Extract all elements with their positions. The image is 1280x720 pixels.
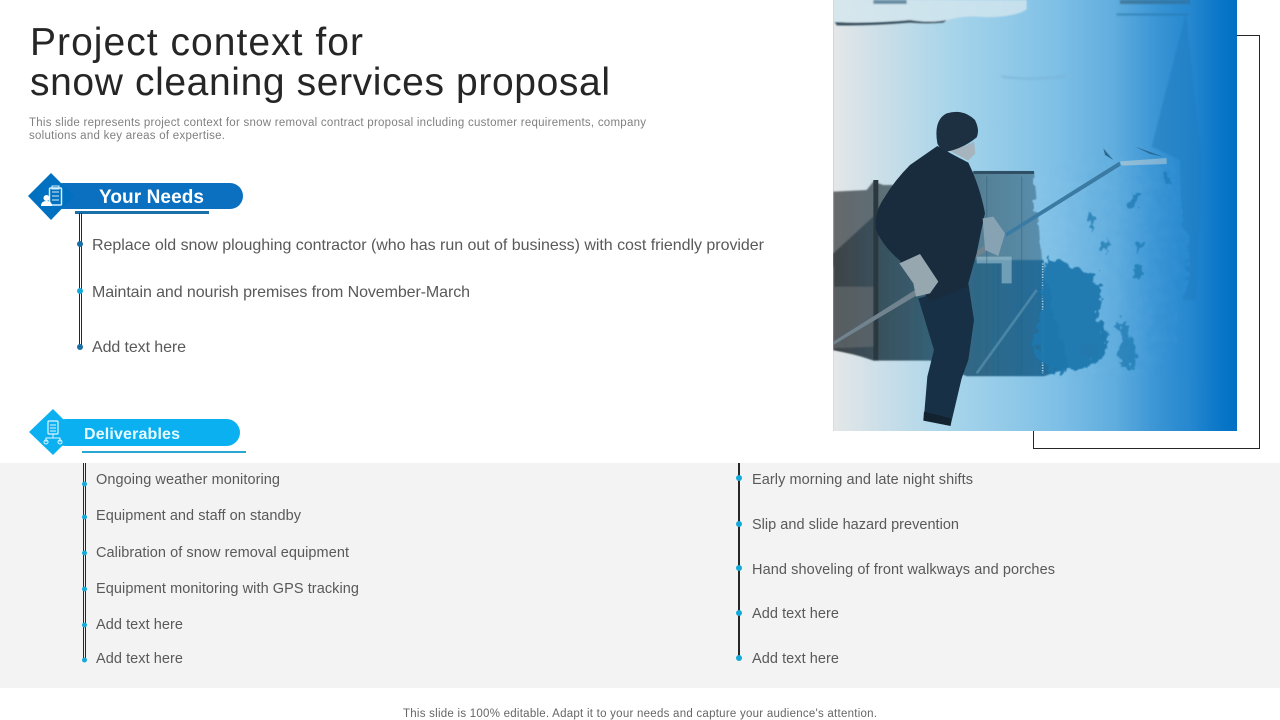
pill [52,419,240,446]
shoveled snow [1032,177,1190,292]
subtitle: This slide represents project context for snow removal contract proposal including customer requirements, company [29,117,646,129]
decorative photo frame [1034,36,1260,448]
list: deliverables left column: Add text here [96,651,183,667]
list: deliverables right column [736,463,1055,667]
list: deliverables right column: Add text here [752,651,839,667]
shovel [1120,158,1167,166]
list: deliverables left column: Add text here [96,617,183,633]
underline [75,211,209,214]
head: knit cap [936,112,978,152]
list: deliverables right column: Add text here [752,606,839,622]
list: your needs [77,213,765,356]
list: deliverables left column: Equipment monitoring with GPS tracking [96,581,359,597]
shed wall upper [833,172,1043,273]
gloves [899,254,938,297]
neck and face [948,142,975,161]
subtitle: solutions and key areas of expertise. [29,130,225,142]
pill [50,183,243,209]
list: deliverables left column [82,463,359,667]
list: deliverables left column: Calibration of snow removal equipment [96,545,349,561]
shed wall lower [833,217,1070,377]
jacket [876,146,985,302]
header: Your Needs: Your Needs [99,187,204,208]
footer note: This slide is 100% editable. Adapt it to your needs and capture your audience's attention. [403,708,877,720]
list: your needs: Add text here [92,339,186,356]
church steeple [1152,21,1190,299]
bottom grey band [0,463,1280,688]
legs [918,283,974,425]
title [30,21,610,104]
dark snow chunks [1033,170,1173,373]
list: deliverables right column: Slip and slide hazard prevention [752,517,959,533]
list: deliverables right column: Early morning and late night shifts [752,472,973,488]
title: Project context for [30,21,363,64]
underline [82,451,246,453]
icon: clipboard and person diamond [28,173,74,220]
boot [923,412,951,426]
list: your needs: Replace old snow ploughing contractor (who has run out of business) with cost friendly provider [92,237,765,254]
header: Deliverables: Deliverables [84,426,180,443]
icon: clipboard with network diamond [29,409,76,455]
top roof edge [833,0,1190,80]
photo: man shoveling snow [833,0,1240,432]
header: Deliverables [29,409,246,455]
list: deliverables right column: Hand shoveling of front walkways and porches [752,562,1055,578]
list: deliverables left column: Ongoing weather monitoring [96,472,280,488]
ground snow [833,350,1046,431]
title: snow cleaning services proposal [30,61,610,104]
subtitle [29,117,646,142]
list: your needs: Maintain and nourish premises from November-March [92,284,470,301]
header: Your Needs [28,173,243,220]
list: deliverables left column: Equipment and staff on standby [96,508,302,524]
